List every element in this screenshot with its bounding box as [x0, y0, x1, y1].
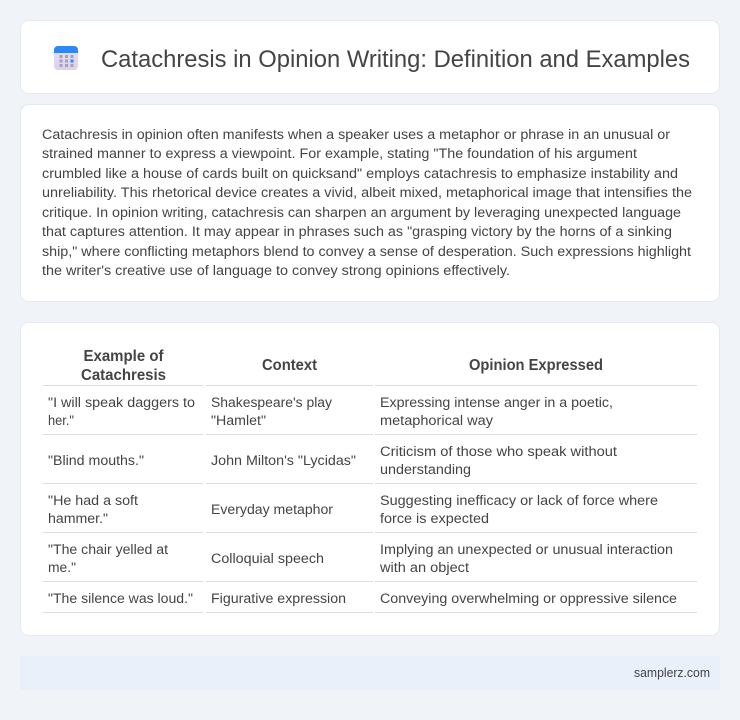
description text: crumbled like a house of cards built on quicksand" employs catachresis to emphasize instability and — [42, 166, 678, 182]
table row 4: me." — [48, 560, 76, 576]
table row 3: Everyday metaphor — [211, 502, 333, 518]
table row 2 — [48, 444, 617, 478]
table header: Example of — [84, 348, 164, 365]
table row 3: hammer." — [48, 511, 108, 527]
footer: samplerz.com — [634, 666, 710, 680]
table row 5: Figurative expression — [211, 591, 346, 607]
description text: that captures attention. It may appear in phrases such as "grasping victory by the horns of a sinking — [42, 224, 672, 240]
panel: table — [20, 322, 720, 636]
table row 5: "The silence was loud." — [48, 591, 193, 607]
table row 3: force is expected — [380, 511, 489, 527]
description text: ship," where conflicting metaphors blend to convey a sense of desperation. Such expressions highlight — [42, 244, 691, 260]
table row 2: John Milton's "Lycidas" — [211, 453, 356, 469]
icon: calendar — [54, 46, 78, 70]
panel: description — [20, 104, 720, 302]
table row 5 — [48, 591, 677, 607]
table row 4 — [48, 542, 673, 576]
table row 1: "Hamlet" — [211, 413, 266, 429]
table header: Context — [262, 357, 317, 374]
table row 3: Suggesting inefficacy or lack of force where — [380, 493, 658, 509]
title: Catachresis in Opinion Writing: Definition and Examples — [101, 46, 690, 73]
description text: the writer's creative use of language to convey strong opinions effectively. — [42, 263, 510, 279]
table row 2: Criticism of those who speak without — [380, 444, 617, 460]
description text: unreliability. This rhetorical device creates a vivid, albeit mixed, metaphorical image that intensifies the — [42, 185, 692, 201]
panel: header — [20, 20, 720, 94]
description text — [42, 127, 692, 279]
table row 1: metaphorical way — [380, 413, 494, 429]
table header — [81, 348, 603, 384]
footer — [20, 656, 720, 690]
table header: Opinion Expressed — [469, 357, 603, 374]
table row 1: Expressing intense anger in a poetic, — [380, 395, 613, 411]
table row 5: Conveying overwhelming or oppressive silence — [380, 591, 677, 607]
table row 3 — [48, 493, 658, 527]
table row 4: "The chair yelled at — [48, 542, 168, 558]
description text: Catachresis in opinion often manifests when a speaker uses a metaphor or phrase in an unusual or — [42, 127, 670, 143]
table row 4: with an object — [379, 560, 469, 576]
table row 1 — [48, 395, 613, 429]
table row 1: Shakespeare's play — [211, 395, 333, 411]
table row 2: understanding — [380, 462, 471, 478]
table row 4: Colloquial speech — [211, 551, 324, 567]
description text: strained manner to express a viewpoint. For example, stating "The foundation of his argument — [42, 146, 637, 162]
table row 2: "Blind mouths." — [48, 453, 144, 469]
table row 1: "I will speak daggers to — [48, 395, 195, 411]
table row 4: Implying an unexpected or unusual interaction — [380, 542, 673, 558]
table header: Catachresis — [81, 367, 166, 384]
table row 1: her." — [48, 413, 74, 429]
table row 3: "He had a soft — [48, 493, 138, 509]
description text: critique. In opinion writing, catachresis can sharpen an argument by leveraging unexpected language — [42, 205, 681, 221]
